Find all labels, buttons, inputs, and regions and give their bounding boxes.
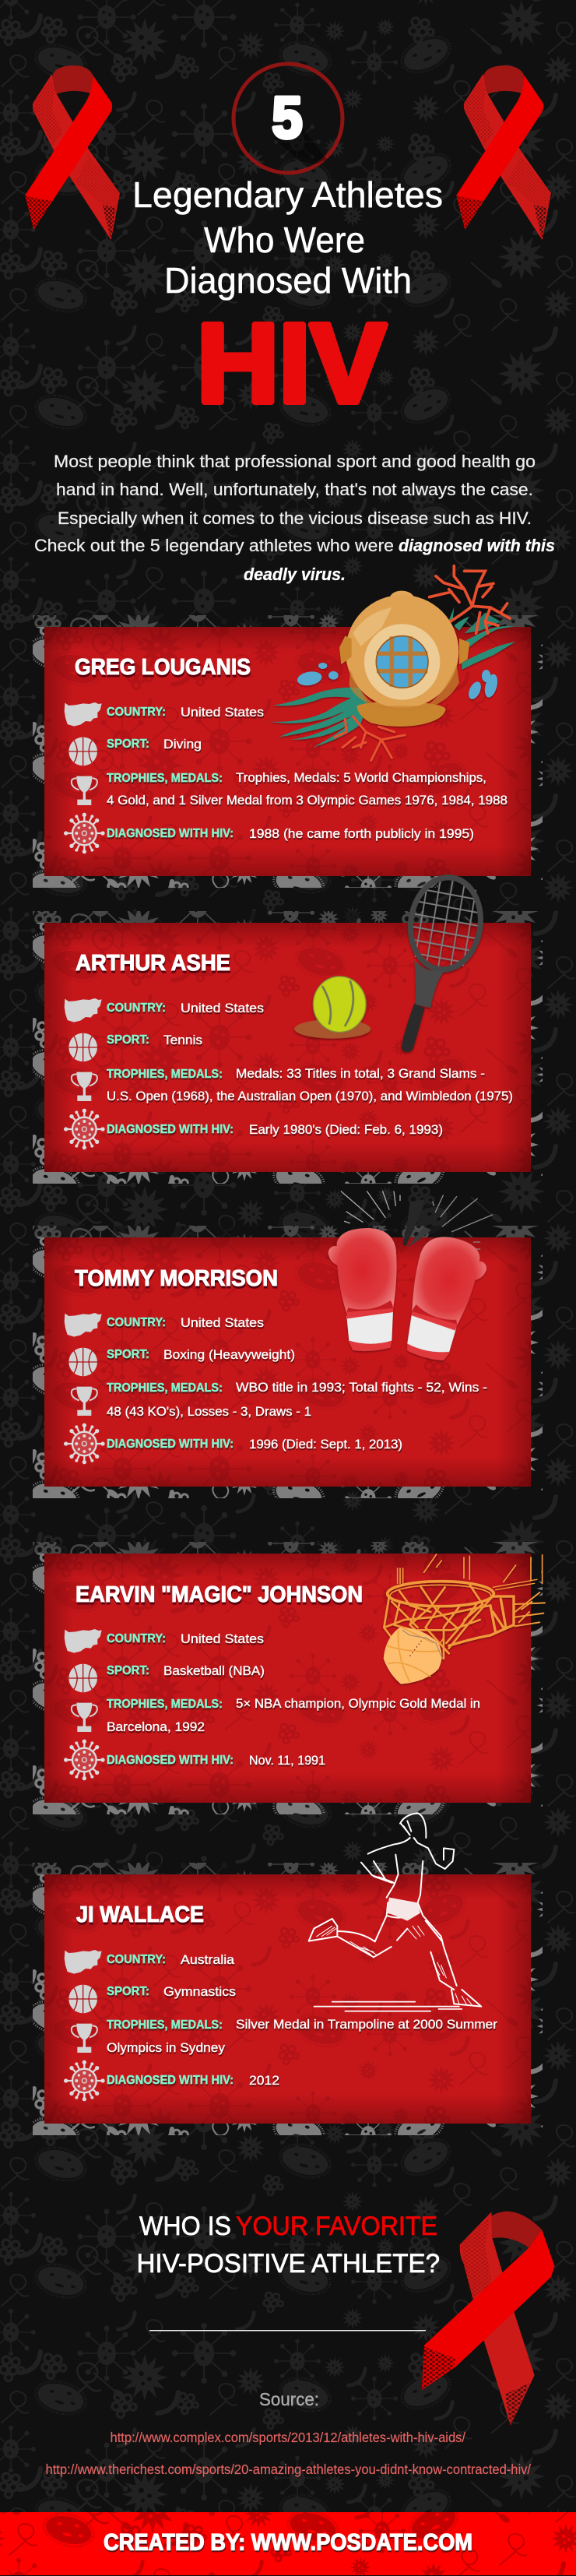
panel: Arthur Ashe	[33, 911, 543, 1184]
details	[107, 1001, 513, 1137]
details	[107, 1316, 487, 1452]
details: Gymnastics	[163, 1985, 236, 1999]
details: 1988 (he came forth publicly in 1995)	[249, 827, 474, 841]
title: Legendary Athletes	[132, 174, 443, 215]
athlete name: ARTHUR ASHE	[76, 951, 230, 976]
details: Basketball (NBA)	[163, 1664, 265, 1678]
closing question: YOUR FAVORITE	[236, 2212, 437, 2241]
details: Nov. 11, 1991	[249, 1754, 325, 1768]
icon: country map	[65, 1313, 102, 1337]
source links: http://www.therichest.com/sports/20-amazing-athletes-you-didnt-know-contracted-hiv/	[45, 2462, 531, 2477]
details: COUNTRY:	[107, 1316, 166, 1329]
details: Medals: 33 Titles in total, 3 Grand Slams -	[236, 1067, 485, 1081]
athlete name: EARVIN "MAGIC" JOHNSON	[76, 1582, 363, 1607]
panel: Greg Louganis	[33, 615, 543, 888]
details: Barcelona, 1992	[107, 1720, 205, 1734]
panel: Earvin Magic Johnson	[33, 1542, 543, 1814]
closing question	[137, 2212, 440, 2279]
illustration: basketball hoop and ball	[384, 1554, 545, 1684]
intro paragraph: Check out the 5 legendary athletes who were	[34, 536, 394, 555]
footer band: CREATED BY: WWW.POSDATE.COM	[104, 2529, 472, 2556]
intro paragraph	[34, 452, 555, 584]
icon: virus	[64, 1423, 105, 1464]
icon: basketball	[68, 737, 97, 765]
icon: country map	[65, 1950, 102, 1974]
details: 48 (43 KO's), Losses - 3, Draws - 1	[107, 1405, 311, 1419]
intro paragraph: Most people think that professional sport and good health go	[54, 452, 536, 471]
athlete name: TOMMY MORRISON	[75, 1266, 278, 1291]
closing question: HIV-POSITIVE ATHLETE?	[137, 2249, 440, 2279]
icon: right red ribbon	[456, 65, 551, 240]
icon: basketball	[68, 1664, 97, 1692]
source links: http://www.complex.com/sports/2013/12/athletes-with-hiv-aids/	[111, 2430, 465, 2445]
details: Trophies, Medals: 5 World Championships,	[236, 771, 486, 785]
title: Who Were	[204, 220, 365, 260]
icon: virus	[64, 1740, 105, 1780]
icon: basketball	[68, 1033, 97, 1061]
details: SPORT:	[107, 1033, 149, 1047]
details: COUNTRY:	[107, 706, 166, 719]
icon: trophy	[72, 2024, 97, 2053]
details: Australia	[181, 1953, 235, 1967]
source heading: Source:	[259, 2389, 319, 2409]
details: TROPHIES, MEDALS:	[107, 772, 223, 785]
icon: basketball	[68, 1348, 97, 1376]
source links	[45, 2430, 531, 2477]
details: TROPHIES, MEDALS:	[107, 1698, 223, 1711]
details: 2012	[249, 2074, 279, 2088]
illustration: tennis racket and ball	[294, 871, 487, 1052]
details: United States	[181, 1001, 264, 1015]
icon: virus	[64, 1109, 105, 1149]
title: Diagnosed With	[164, 260, 412, 301]
details: COUNTRY:	[107, 1953, 166, 1966]
details: 4 Gold, and 1 Silver Medal from 3 Olympic Games 1976, 1984, 1988	[107, 794, 508, 808]
icon: virus	[64, 2060, 105, 2101]
panel: Ji Wallace	[33, 1863, 543, 2135]
details: COUNTRY:	[107, 1632, 166, 1645]
icon: trophy	[72, 776, 97, 805]
details: Early 1980's (Died: Feb. 6, 1993)	[249, 1123, 443, 1137]
details	[107, 706, 508, 841]
closing question: WHO IS	[139, 2212, 231, 2241]
details: TROPHIES, MEDALS:	[107, 1381, 223, 1395]
icon: virus	[64, 813, 105, 853]
details: United States	[181, 1632, 264, 1646]
details: WBO title in 1993; Total fights - 52, Wins -	[236, 1381, 487, 1395]
details: SPORT:	[107, 1985, 149, 1998]
athlete name: JI WALLACE	[76, 1902, 204, 1927]
details: DIAGNOSED WITH HIV:	[107, 2074, 234, 2087]
illustration: sketched runner	[309, 1813, 481, 2011]
details: Diving	[163, 737, 202, 751]
icon: country map	[65, 702, 102, 727]
details: Tennis	[163, 1033, 202, 1047]
divider line	[149, 2330, 426, 2331]
details: SPORT:	[107, 737, 149, 751]
panel: Tommy Morrison	[33, 1226, 543, 1498]
details: 1996 (Died: Sept. 1, 2013)	[249, 1438, 402, 1452]
details	[107, 1632, 480, 1768]
intro paragraph: deadly virus.	[244, 565, 346, 584]
details: Boxing (Heavyweight)	[163, 1348, 295, 1362]
details: TROPHIES, MEDALS:	[107, 1068, 223, 1081]
details: TROPHIES, MEDALS:	[107, 2018, 223, 2032]
title	[132, 174, 443, 301]
details: DIAGNOSED WITH HIV:	[107, 827, 234, 840]
icon: trophy	[72, 1387, 97, 1416]
details: U.S. Open (1968), the Australian Open (1970), and Wimbledon (1975)	[107, 1089, 513, 1103]
details: SPORT:	[107, 1348, 149, 1361]
footer band	[0, 2512, 576, 2576]
icon: trophy	[72, 1072, 97, 1101]
icon: left red ribbon	[25, 65, 120, 240]
title: HIV: HIV	[197, 301, 386, 426]
illustration: diving helmet with coral and seaweed	[269, 566, 515, 761]
details: DIAGNOSED WITH HIV:	[107, 1754, 234, 1767]
icon: basketball	[68, 1985, 97, 2013]
illustration: boxing gloves with impact rays	[328, 1191, 493, 1366]
number badge: 5: 5	[272, 85, 302, 150]
details: United States	[181, 706, 264, 720]
details: DIAGNOSED WITH HIV:	[107, 1438, 234, 1451]
details: DIAGNOSED WITH HIV:	[107, 1123, 234, 1136]
details: COUNTRY:	[107, 1001, 166, 1015]
details: United States	[181, 1316, 264, 1330]
details: Silver Medal in Trampoline at 2000 Summer	[236, 2018, 498, 2032]
intro paragraph: Especially when it comes to the vicious disease such as HIV.	[58, 509, 532, 528]
icon: trophy	[72, 1703, 97, 1732]
details: 5× NBA champion, Olympic Gold Medal in	[236, 1697, 480, 1711]
icon: country map	[65, 1629, 102, 1653]
details: Olympics in Sydney	[107, 2041, 226, 2055]
number badge: 5	[234, 64, 342, 173]
intro paragraph: diagnosed with this	[399, 536, 555, 555]
intro paragraph: hand in hand. Well, unfortunately, that's not always the case.	[56, 480, 533, 499]
details	[107, 1953, 498, 2088]
icon: large red ribbon	[422, 2212, 555, 2426]
icon: country map	[65, 998, 102, 1022]
athlete name: GREG LOUGANIS	[75, 655, 251, 680]
details: SPORT:	[107, 1664, 149, 1677]
